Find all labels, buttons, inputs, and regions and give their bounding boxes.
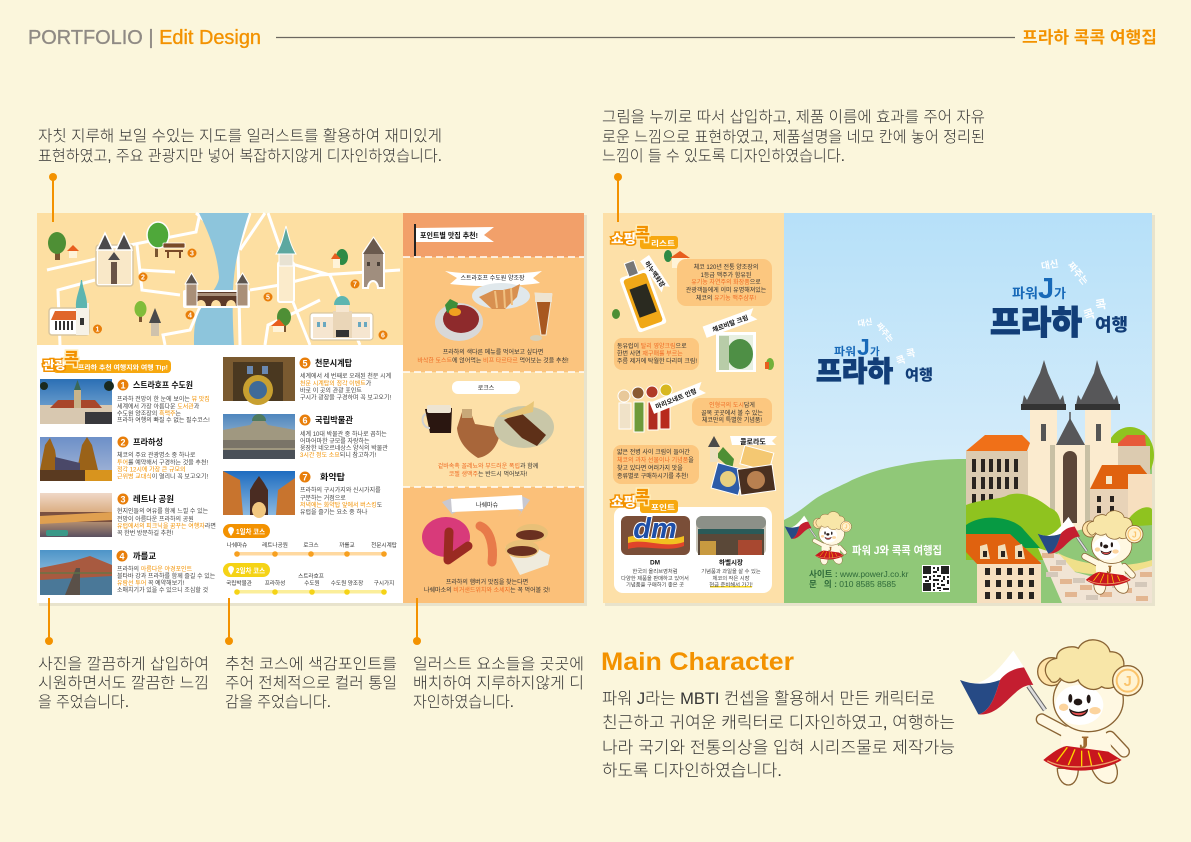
- text box: wafer: [613, 445, 699, 484]
- map number badges: 4: [188, 312, 192, 320]
- pointer line: courses: [225, 598, 233, 645]
- text: main character description: 파워 J라는 MBTI 컨셉을 활용해서 만든 캐릭터로: [602, 689, 935, 708]
- header: [28, 26, 1157, 49]
- panel: cover: [784, 213, 1154, 603]
- text: sight 2: 정각 12시에 가장 큰 규모의: [117, 466, 186, 474]
- title: cover large: 대신: [1040, 258, 1059, 273]
- label: Lokal: [452, 381, 520, 394]
- text: sight 5: 바로 이 곳의 관광 포인트: [300, 386, 362, 394]
- title: portfolio: PORTFOLIO | Edit Design: [28, 26, 261, 49]
- photo 3: Letna park: [40, 493, 112, 537]
- course 1 route: 까를교: [339, 541, 355, 549]
- text box: wafer: 찾고 있다면 여러가지 맛을: [617, 464, 683, 472]
- course 2 route: 수도원 양조장: [331, 579, 363, 587]
- label: Lokal: 로크스: [478, 385, 495, 392]
- caption: top left description: [38, 127, 442, 165]
- ribbon: Nase Maso: 나쉐마슈: [476, 501, 499, 509]
- ribbon: Strahov brewery: [445, 271, 542, 286]
- text: Havel market: [701, 558, 761, 588]
- text: sight 2: 투어를 예약해서 구경하는 것을 추천!: [117, 458, 208, 466]
- heading: shopping list tag: 리스트: [651, 239, 675, 248]
- illustration: tartare and toast and beer: [435, 283, 552, 341]
- text: Havel market: 하벨시장: [719, 558, 743, 566]
- text: sight 3: 전망이 아름다운 프라하의 공원: [117, 515, 194, 523]
- caption: top right description: [602, 108, 985, 165]
- illustration: front orange-roof building: [966, 534, 1041, 603]
- heading: restaurant flag: [414, 224, 494, 256]
- photo 6: national museum: [223, 414, 295, 459]
- caption: illustrations: 일러스트 요소들을 곳곳에: [413, 655, 584, 673]
- course 2 route: [223, 563, 394, 595]
- illustration: marionettes: [618, 384, 672, 432]
- course 2 route: 구시가지: [374, 579, 394, 587]
- text: sight 6: 6: [302, 416, 308, 426]
- text: sight 3: 레트나 공원: [133, 493, 174, 504]
- text: Strahov food: 바삭한 토스트에 얹어먹는 비프 타르타르 먹어보는 것을 추천!: [417, 356, 569, 364]
- text: sight 2: 프라하성: [133, 436, 163, 447]
- text: Havel market: 현금 준비해서 가기!: [709, 580, 753, 588]
- course 2 route: 프라하성: [265, 579, 285, 587]
- title: cover small: 프라하: [816, 356, 893, 387]
- text: sight 3: 꼭 한번 방문하길 추천!: [117, 529, 174, 537]
- course 1 route: 나쉐마슈: [227, 541, 247, 549]
- icon: QR code: [922, 565, 950, 592]
- text: Lokal food: [438, 462, 538, 478]
- course 2 route: 수도원: [304, 579, 320, 587]
- text: DM: [621, 560, 689, 588]
- text: sight 7: [300, 471, 383, 516]
- text: Nase Maso food: 프라하의 햄버거 맛집을 찾는다면: [446, 578, 528, 586]
- illustration: back bushes and red-roof building: [1106, 427, 1154, 483]
- text: sight 3: [117, 493, 216, 537]
- text: sight 5: 천문 시계탑의 정각 이벤트가: [300, 380, 372, 388]
- landmark: clock tower 5: [276, 226, 296, 302]
- course 1 route: [223, 524, 397, 557]
- river: [194, 213, 249, 345]
- text: sight 5: 5: [302, 358, 308, 368]
- heading: restaurant flag: 포인트별 맛집 추천!: [420, 230, 478, 240]
- heading: shopping point tag: 쇼핑: [611, 495, 636, 509]
- pointer line: shopping: [614, 173, 622, 222]
- illustration: green bushes and hillside: [966, 494, 1152, 603]
- caption: courses: 감을 주었습니다.: [225, 693, 331, 711]
- panel: left brochure: [37, 213, 584, 603]
- text: sight 1: 수도원 양조장의 흑맥주는: [117, 410, 182, 418]
- text: Nase Maso food: [424, 578, 550, 594]
- photo: dm logo: [621, 513, 690, 555]
- caption: top right description: 그림을 누끼로 따서 삽입하고, 제품 이름에 효과를 주어 자유: [602, 108, 985, 126]
- text: main character description: 친근하고 귀여운 캐릭터로 디자인하였고, 여행하는: [602, 713, 955, 732]
- text: sight 5: [300, 357, 391, 402]
- title: cover large: 짜주는: [1065, 260, 1090, 288]
- text box: marionette: [692, 398, 772, 426]
- text: sight 4: [116, 550, 216, 594]
- heading: shopping list tag: 쇼핑: [611, 232, 636, 246]
- text: sight 4: 소매치기가 있을 수 있으니 조심할 것: [117, 586, 209, 594]
- landmark: tree and bench 3: [147, 222, 185, 258]
- pointer line: photos: [45, 598, 53, 645]
- title: brochure name: 프라하 콕콕 여행집: [1022, 27, 1157, 47]
- photo 7: powder tower: [223, 471, 295, 518]
- text: Strahov food: [417, 348, 569, 364]
- title: cover small: 가: [870, 345, 880, 358]
- landmark: museum 6: [310, 296, 373, 340]
- heading: tourism tip tag: 관광: [43, 358, 66, 372]
- landmark: powder gate 7: [363, 238, 384, 288]
- caption: top right description: 로운 느낌으로 표현하였고, 제품설명을 네모 칸에 놓어 정리된: [602, 128, 985, 146]
- icon: small mascot: [785, 512, 852, 565]
- icon: main mascot: [960, 640, 1143, 785]
- illustration: beer shampoo bottle: [615, 257, 667, 333]
- title: cover large: 콕: [1094, 297, 1108, 313]
- text box: leg cream: 동유럽이 탈리 영양크림으로: [617, 342, 687, 350]
- text: sight 3: 유럽에서의 피크닉을 꿈꾸는 여행자라면: [117, 522, 216, 530]
- text box: beer shampoo: 1등급 맥주가 함유된: [701, 271, 751, 279]
- illustration: knuckle, ribs and beer: [423, 401, 554, 458]
- text box: beer shampoo: [677, 259, 772, 306]
- panel: shopping list: [603, 213, 784, 603]
- title: cover large: J: [1038, 273, 1054, 305]
- title: cover small: 콕: [895, 354, 907, 368]
- title: cover small: [816, 316, 933, 387]
- label: beer shampoo: 하누맥화장: [643, 259, 667, 289]
- heading: shopping point tag: 콕: [635, 488, 650, 507]
- panel: sights list: [37, 345, 403, 603]
- text box: wafer: 체코의 과자 선물이나 기념품을: [617, 456, 694, 464]
- text box: wafer: 종류별로 구매하시기를 추천!: [617, 472, 689, 480]
- heading: main character: Main Character: [601, 648, 794, 676]
- map number badges: 2: [141, 274, 145, 282]
- text: Lokal food: 겉바속촉 꼴레뇨와 부드러운 폭립과 함께: [438, 462, 538, 470]
- text box: leg cream: 한번 사면 재구매를 부르는: [617, 350, 683, 358]
- photo: Havel market: [696, 516, 766, 555]
- text: sight 1: [117, 379, 210, 424]
- text box: marionette: 체코만의 특별한 기념품!: [702, 416, 762, 424]
- panel: illustrated map: [37, 213, 403, 345]
- label: beer shampoo: [640, 255, 671, 292]
- caption: illustrations: 자인하였습니다.: [413, 693, 514, 711]
- title: cover small: 파워: [834, 345, 856, 358]
- text: sight 5: 세계에서 세 번째로 오래된 천문 시계: [300, 372, 391, 380]
- panel: restaurant column: [403, 213, 584, 603]
- pointer line: map: [49, 173, 57, 222]
- caption: illustrations: 배치하여 지루하지않게 디: [413, 674, 584, 692]
- text: main character description: [602, 689, 955, 780]
- title: cover large: 콕: [1082, 306, 1097, 323]
- heading: shopping list tag: 콕: [635, 225, 650, 244]
- text box: beer shampoo: 체코 120년 전통 양조장의: [694, 263, 758, 271]
- course 2 route: 국립박물관: [226, 579, 252, 587]
- text box: beer shampoo: 유기농 자연주의 화장품으로: [691, 278, 761, 286]
- map number badges: 7: [353, 282, 357, 288]
- photo: dm logo: dm: [633, 513, 677, 545]
- text: Nase Maso food: 나쉐마소의 비거샌드위치와 소세지는 꼭 먹어볼 것!: [424, 586, 550, 594]
- caption: courses: [225, 655, 397, 711]
- course 1 route: 로크스: [303, 542, 319, 549]
- map number badges: 6: [381, 332, 385, 340]
- icon: mascot on cover: [1038, 511, 1143, 594]
- text box: marionette: 인형극의 도시답게: [709, 401, 755, 409]
- text: main character description: 하도록 디자인하였습니다.: [602, 761, 782, 780]
- text: main character description: 나라 국기와 전통의상을 입혀 시리즈물로 제작가능: [602, 738, 955, 757]
- text: sight 4: 프라하의 아름다운 야경포인트: [117, 565, 193, 573]
- text: Havel market: 체코의 작은 시장: [712, 574, 750, 582]
- text: DM: 다양한 제품을 판매하고 있어서: [621, 574, 689, 582]
- title: cover small: 여행: [905, 367, 933, 384]
- brochure shadows: [39, 215, 1155, 606]
- text: sight 6: 세계 10대 박물관 중 하나로 꼽히는: [300, 430, 387, 438]
- caption: photos: 시원하면서도 깔끔한 느낌: [38, 674, 209, 692]
- text: sight 1: 프라하 여행의 빠질 수 없는 필수코스!: [117, 416, 210, 424]
- text: sight 7: 구분하는 거점으로: [300, 494, 346, 502]
- text box: beer shampoo: 체코의 유기농 맥주샴푸!: [696, 294, 756, 302]
- title: cover large: 가: [1054, 286, 1066, 301]
- caption: illustrations: [413, 655, 584, 711]
- heading: tourism tip tag: 콕: [64, 350, 79, 369]
- map number badges: 3: [190, 250, 194, 258]
- text: brand line: 파워 J와 콕콕 여행집: [852, 543, 942, 557]
- illustration: sausages and burger: [422, 517, 550, 575]
- text: contact info: [809, 569, 909, 589]
- heading: shopping point tag: [611, 488, 678, 513]
- text: sight 5: 천문시계탑: [315, 357, 352, 368]
- caption: courses: 주어 전체적으로 컬러 통일: [225, 674, 397, 692]
- text: sight 2: 2: [120, 438, 126, 448]
- map number badges: 5: [266, 294, 270, 302]
- text: sight 3: 3: [120, 494, 126, 504]
- text: sight 1: 프라하 전망이 한 눈에 보이는 뷰 맛집: [117, 395, 210, 403]
- caption: top left description: 표현하였고, 주요 관광지만 넣어 복잡하지않게 디자인하였습니다.: [38, 147, 442, 165]
- label: marionette: 마리오네트 인형: [654, 386, 698, 411]
- text: sight 4: 4: [119, 552, 125, 562]
- text box: leg cream: 주름 제거에 탁월한 다리미 크림!: [617, 357, 697, 365]
- heading: tourism tip tag: [43, 350, 171, 373]
- title: cover large: 프라하: [990, 304, 1082, 341]
- map number badges: 1: [96, 326, 100, 334]
- course 1 route: 천문시계탑: [371, 541, 397, 549]
- landmark: twin spire church 2: [96, 233, 133, 286]
- text: sight 6: [300, 414, 388, 459]
- label: marionette: [650, 382, 706, 414]
- text box: leg cream: [614, 338, 699, 370]
- text: sight 4: 블타바 강과 프라하를 함께 즐길 수 있는: [117, 572, 216, 580]
- illustration: cream box: [716, 332, 756, 372]
- text: Havel market: 기념품과 과일을 살 수 있는: [701, 567, 761, 575]
- heading: tourism tip tag: 프라하 추천 여행지와 여행 Tip!: [78, 362, 168, 372]
- map number badges: [93, 248, 388, 340]
- illustration: right cream building: [1090, 465, 1152, 526]
- text: sight 4: 까를교: [133, 550, 156, 561]
- title: cover large: 여행: [1095, 315, 1128, 335]
- illustration: kolonada wafers: [708, 436, 776, 495]
- text: sight 7: 7: [302, 472, 308, 482]
- photo 5: astronomical clock: [223, 357, 295, 405]
- text: sight 7: 저녁에는 화약탑 앞에서 버스킹도: [300, 501, 383, 509]
- text: sight 2: 체코의 주요 관광명소 중 하나로: [117, 451, 196, 459]
- text: sight 1: 1: [120, 380, 126, 390]
- title: cover large: 파워: [1012, 286, 1038, 301]
- text: sight 5: 구시가 광장을 구경하며 꼭 보고오기!: [300, 394, 391, 402]
- caption: photos: 을 주었습니다.: [38, 693, 129, 711]
- icon: tree and house: [612, 250, 774, 370]
- ribbon: Nase Maso: [442, 495, 530, 518]
- course 1 route: 레트나공원: [262, 541, 288, 549]
- text: sight 7: 프라하의 구시가지와 신시가지를: [300, 486, 381, 494]
- course 2 route: 2일차 코스: [236, 566, 266, 575]
- caption: photos: 사진을 깔끔하게 삽입하여: [38, 655, 209, 673]
- panel: shopping points: [611, 488, 772, 593]
- text box: beer shampoo: 관광객들에게 이미 유명해져있는: [686, 286, 767, 294]
- title: cover small: 콕: [905, 347, 916, 360]
- caption: top left description: 자칫 지루해 보일 수있는 지도를 일러스트를 활용하여 재미있게: [38, 127, 442, 145]
- hill: [784, 459, 1152, 603]
- landmark: church 1: [49, 280, 89, 335]
- photo 1: Strahov monastery: [40, 379, 114, 424]
- title: cover small: 대신: [857, 316, 873, 329]
- illustration: cobblestone street: [1038, 548, 1152, 603]
- course 2 route: 스트라호프: [298, 572, 324, 580]
- title: cover small: 짜주는: [874, 321, 896, 344]
- text: sight 3: 현지인들의 여유를 함께 느낄 수 있는: [117, 507, 209, 515]
- text: contact info: 문 의 : 010 8585 8585: [809, 579, 896, 589]
- text: sight 7: 화약탑: [320, 471, 345, 482]
- illustration: left tan building: [966, 435, 1030, 541]
- ribbon: Strahov brewery: 스트라호프 수도원 양조장: [460, 274, 525, 282]
- text: contact info: 사이트 : www.powerJ.co.kr: [809, 569, 909, 579]
- text: DM: 기념품을 구매하기 좋은 곳: [626, 580, 684, 588]
- text: sight 7: 유럽을 즐기는 요소 중 하나: [300, 508, 368, 516]
- text: DM: DM: [650, 560, 660, 566]
- pointer line: illustrations: [413, 598, 421, 645]
- illustration: gothic church: [1021, 360, 1120, 538]
- label: kolonada: [730, 436, 777, 446]
- text: DM: 한국의 올리브영처럼: [632, 567, 678, 575]
- text: sight 2: 근위병 교대식이 열리니 꼭 보고오기!: [117, 472, 208, 480]
- label: cream: [703, 308, 757, 338]
- text: Lokal food: 코젤 생맥주는 반드시 먹어보자!: [449, 470, 528, 478]
- caption: photos: [38, 655, 209, 711]
- photo 4: Charles bridge: [40, 550, 112, 595]
- title: cover small: J: [857, 334, 870, 360]
- text box: wafer: 얇은 전병 사이 크림이 들어간: [617, 448, 690, 456]
- label: cream: 체르비탈 크림: [711, 313, 749, 334]
- text: Strahov food: 프라하의 색다른 메뉴를 먹어보고 싶다면: [443, 348, 543, 356]
- text box: marionette: 골목 곳곳에서 볼 수 있는: [701, 409, 763, 417]
- caption: courses: 추천 코스에 색감포인트를: [225, 655, 397, 673]
- text: sight 6: 어마어마한 규모를 자랑하는: [300, 437, 370, 445]
- course 1 route: 1일차 코스: [236, 527, 266, 536]
- label: kolonada: 콜로라도: [740, 437, 766, 446]
- panel: right brochure: [603, 213, 1154, 603]
- text: sight 4: 유람선 투어 꼭 예약해보기!: [117, 579, 185, 587]
- text: sight 6: 웅장한 네오르네상스 양식의 박물관: [300, 444, 388, 452]
- text: sight 1: 스트라호프 수도원: [133, 379, 193, 390]
- text: sight 6: 국립박물관: [315, 414, 353, 425]
- title: cover large: [990, 258, 1128, 341]
- landmark: bridge 4: [183, 273, 250, 308]
- icons: small trees and houses: [48, 232, 348, 336]
- heading: shopping point tag: 포인트: [651, 502, 675, 512]
- text: sight 2: [117, 436, 208, 480]
- text: sight 1: 세계에서 가장 아름다운 도서관과: [117, 402, 200, 410]
- caption: top right description: 느낌이 들 수 있도록 디자인하였습니다.: [602, 147, 845, 165]
- photo 2: Prague castle: [40, 437, 112, 481]
- heading: shopping list tag: [611, 225, 678, 249]
- text: sight 6: 3시간 정도 소요되니 참고하기!: [300, 451, 377, 459]
